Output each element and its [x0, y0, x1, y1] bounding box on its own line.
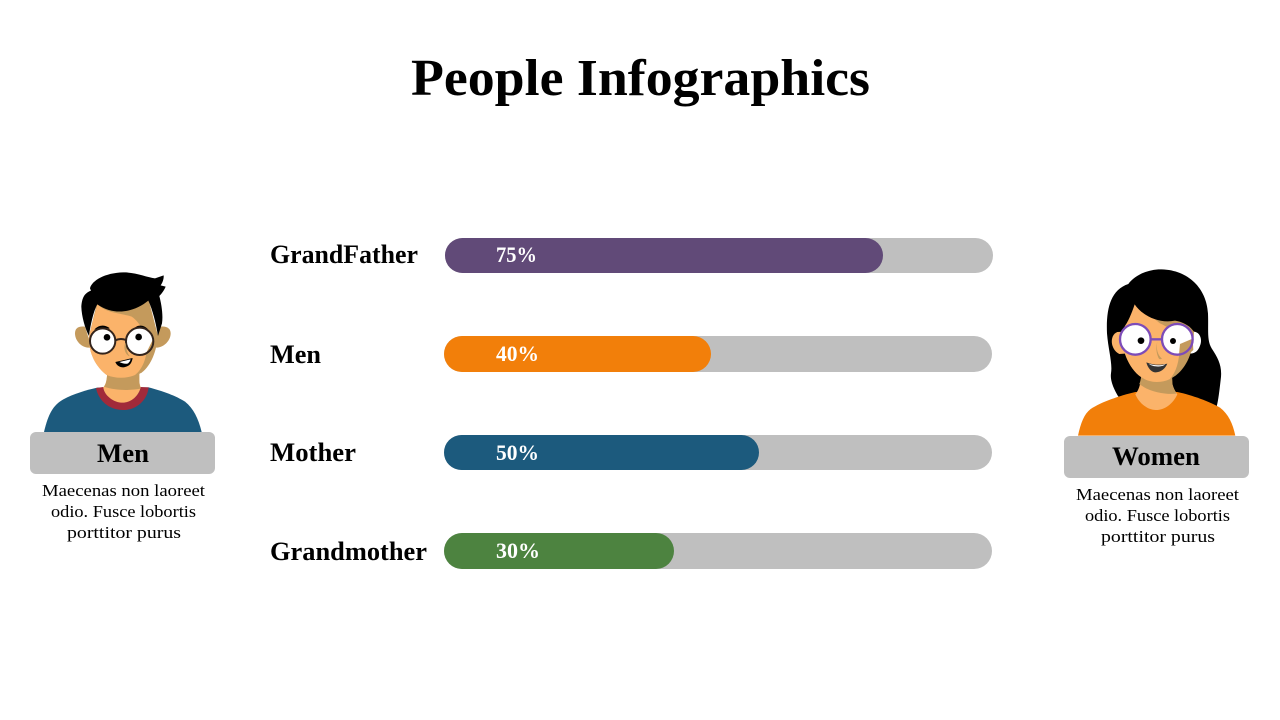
text block: men description: odio. Fusce lobortis [51, 502, 196, 521]
row: GrandFather 75% [270, 238, 993, 273]
text block: women description: Maecenas non laoreet [1076, 485, 1239, 504]
row: Mother 50%: Mother [270, 438, 356, 467]
row: Men 40% [270, 336, 992, 372]
row: Men 40%: Men [270, 340, 322, 369]
row: Grandmother 30%: Grandmother [270, 537, 427, 566]
title: People Infographics [411, 50, 870, 107]
text block: women description: odio. Fusce lobortis [1085, 506, 1230, 525]
text block: women description: porttitor purus [1101, 527, 1215, 546]
icon: man avatar [44, 272, 202, 432]
row: Men 40%: 40% [496, 341, 539, 366]
panel: women [1064, 269, 1249, 546]
icon: woman avatar [1078, 269, 1235, 436]
bar chart [270, 238, 993, 569]
text block: women description [1076, 485, 1239, 546]
label box: Men: Men [97, 439, 150, 468]
label box: Women: Women [1112, 442, 1201, 471]
row: GrandFather 75%: GrandFather [270, 240, 418, 269]
text block: men description: Maecenas non laoreet [42, 481, 205, 500]
row: GrandFather 75%: 75% [496, 242, 537, 267]
label box: Women [1064, 436, 1249, 478]
text block: men description: porttitor purus [67, 523, 181, 542]
row: Mother 50%: 50% [496, 440, 539, 465]
panel: men [30, 272, 215, 542]
row: Mother 50% [270, 435, 992, 470]
label box: Men [30, 432, 215, 474]
row: Grandmother 30%: 30% [496, 538, 540, 563]
row: Grandmother 30% [270, 533, 992, 569]
text block: men description [42, 481, 205, 542]
